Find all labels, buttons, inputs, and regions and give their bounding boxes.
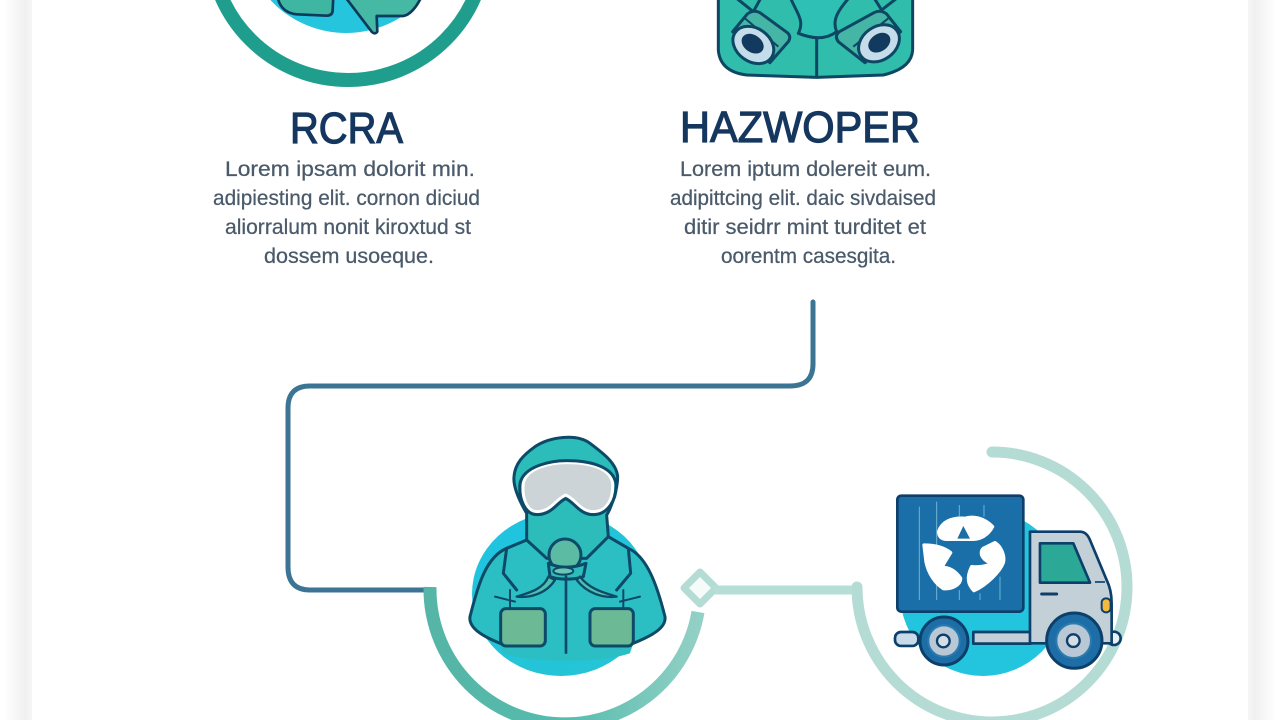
arrow: arc around protective suit [430,587,698,720]
arrow: connector line to truck [714,586,858,594]
text block: RCRA description [213,158,480,268]
text block: HAZWOPER description: adipittcing elit. daic sivdaised [670,187,936,210]
arrow: connector from HAZWOPER to protective suit [288,302,813,590]
icon: protective suit worker [470,437,665,676]
text block: RCRA description: adipiesting elit. cornon diciud [213,187,480,210]
text block: RCRA description: Lorem ipsam dolorit min. [225,158,475,181]
connector node: diamond [684,572,716,604]
text block: HAZWOPER description [670,158,936,268]
heading: RCRA: RCRA [290,104,404,153]
arrow: arc around truck [857,452,1127,720]
icon: RCRA speech bubbles in ring [210,0,486,80]
icon: HAZWOPER respirator mask [718,0,913,77]
text block: HAZWOPER description: ditir seidrr mint turditet et [684,216,926,239]
icon: recycling truck [895,496,1121,676]
text block: RCRA description: aliorralum nonit kiroxtud st [225,216,471,239]
text block: RCRA description: dossem usoeque. [264,245,434,268]
text block: HAZWOPER description: oorentm casesgita. [721,245,896,268]
text block: HAZWOPER description: Lorem iptum dolereit eum. [680,158,931,181]
heading: HAZWOPER: HAZWOPER [680,103,920,152]
